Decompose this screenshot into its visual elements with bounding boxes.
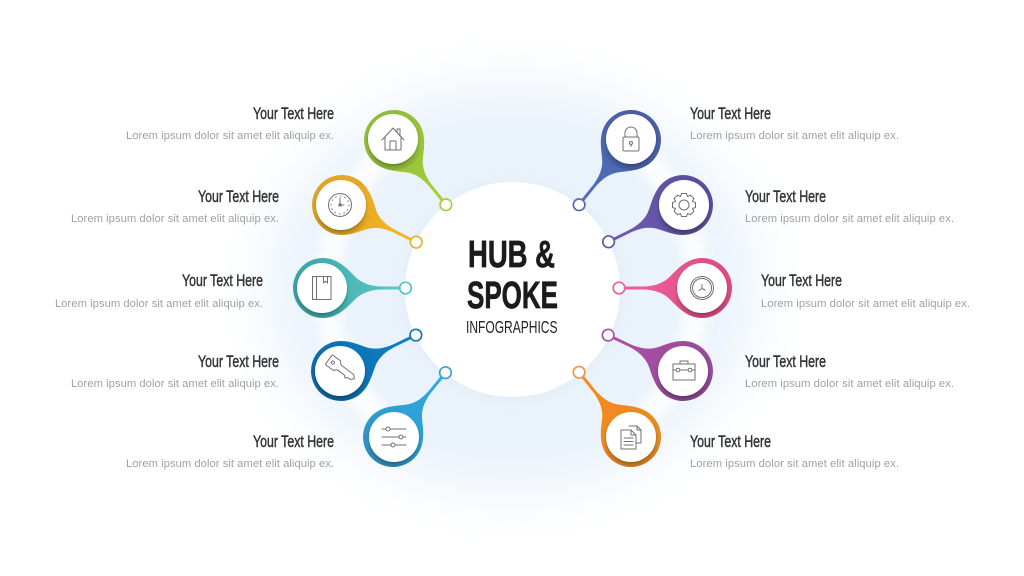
icon: padlock bbox=[623, 127, 639, 151]
pin: magenta briefcase bbox=[590, 306, 723, 411]
text block: right 1 bbox=[690, 104, 899, 142]
pin: purple gear bbox=[590, 165, 723, 271]
text block: right 2: Lorem ipsum dolor sit amet elit aliquip ex. bbox=[745, 213, 954, 225]
text block: left 2 bbox=[71, 187, 279, 225]
icon: sliders bbox=[382, 427, 406, 447]
pin: yellow clock bbox=[302, 165, 435, 272]
text block: left 2: Your Text Here bbox=[198, 187, 279, 206]
text block: right 3: Lorem ipsum dolor sit amet elit aliquip ex. bbox=[761, 298, 970, 310]
text block: right 2 bbox=[745, 187, 954, 225]
text block: right 3 bbox=[761, 271, 970, 310]
text block: right 4 bbox=[745, 352, 954, 390]
text block: right 4: Lorem ipsum dolor sit amet elit aliquip ex. bbox=[745, 378, 954, 390]
hub title bbox=[466, 234, 558, 337]
hub title: INFOGRAPHICS bbox=[466, 317, 558, 337]
icon: book bbox=[312, 276, 331, 300]
text block: left 3: Your Text Here bbox=[182, 271, 263, 290]
text block: left 4 bbox=[71, 352, 279, 390]
pin: light blue sliders bbox=[351, 349, 472, 479]
text block: right 3: Your Text Here bbox=[761, 271, 842, 290]
text block: left 5: Your Text Here bbox=[253, 432, 334, 451]
icon: gear bbox=[672, 194, 696, 216]
text block: left 3 bbox=[55, 271, 263, 310]
hub title: HUB & bbox=[468, 234, 555, 276]
pin: blue key bbox=[301, 306, 434, 411]
text block: right 5 bbox=[690, 432, 899, 470]
text block: left 1 bbox=[126, 104, 334, 142]
icon: clock bbox=[328, 194, 352, 216]
pin: pink clock bbox=[613, 258, 732, 318]
pin: green home bbox=[352, 98, 473, 228]
icon: key bbox=[325, 355, 358, 384]
text block: right 2: Your Text Here bbox=[745, 187, 826, 206]
text block: left 2: Lorem ipsum dolor sit amet elit aliquip ex. bbox=[71, 213, 279, 225]
icon: briefcase bbox=[673, 361, 695, 380]
text block: right 1: Lorem ipsum dolor sit amet elit aliquip ex. bbox=[690, 130, 899, 142]
text block: left 1: Lorem ipsum dolor sit amet elit aliquip ex. bbox=[126, 130, 334, 142]
text block: left 3: Lorem ipsum dolor sit amet elit aliquip ex. bbox=[55, 298, 263, 310]
soft blue glow bbox=[267, 83, 757, 493]
pin: indigo lock bbox=[552, 98, 673, 228]
icon: wall clock bbox=[690, 276, 714, 300]
pin: orange documents bbox=[552, 349, 673, 479]
text block: left 1: Your Text Here bbox=[253, 104, 334, 123]
text block: right 5: Your Text Here bbox=[690, 432, 771, 451]
text block: right 4: Your Text Here bbox=[745, 352, 826, 371]
icon: documents bbox=[621, 426, 641, 449]
pin: teal book bbox=[293, 258, 411, 318]
icon: house bbox=[382, 128, 404, 150]
text block: left 5: Lorem ipsum dolor sit amet elit aliquip ex. bbox=[126, 458, 334, 470]
hub circle bbox=[404, 182, 620, 399]
text block: left 5 bbox=[126, 432, 334, 470]
text block: right 5: Lorem ipsum dolor sit amet elit aliquip ex. bbox=[690, 458, 899, 470]
text block: left 4: Your Text Here bbox=[198, 352, 279, 371]
hub title: SPOKE bbox=[467, 275, 558, 317]
text block: left 4: Lorem ipsum dolor sit amet elit aliquip ex. bbox=[71, 378, 279, 390]
text block: right 1: Your Text Here bbox=[690, 104, 771, 123]
